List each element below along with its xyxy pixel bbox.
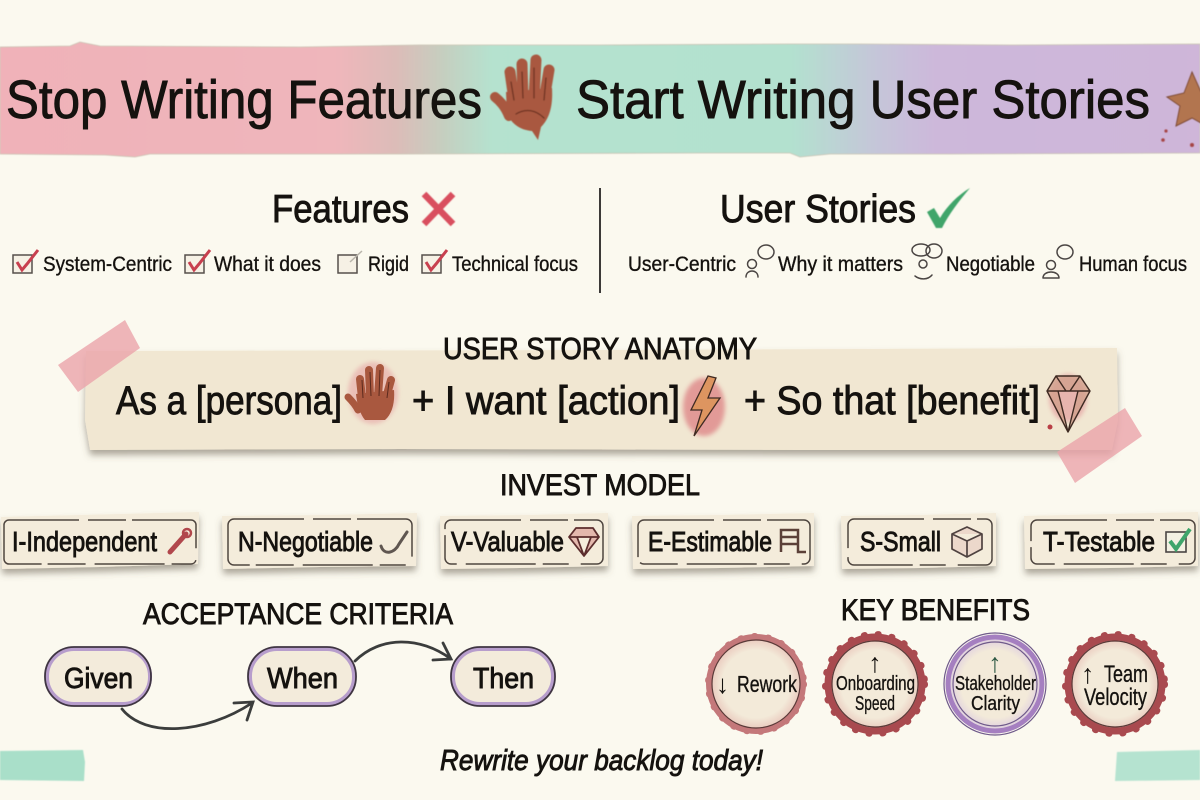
chip: testable — [1024, 512, 1198, 569]
heading: features: Features — [272, 188, 409, 231]
feature item: what it does — [185, 250, 321, 276]
pill: given: Given — [64, 663, 133, 695]
story item: negotiable: Negotiable — [946, 253, 1035, 276]
chip: valuable — [440, 513, 608, 569]
icon: green check — [927, 188, 970, 228]
chip: negotiable: N-Negotiable — [238, 526, 373, 557]
panel: invest chips — [1, 512, 1198, 569]
title banner — [0, 42, 1200, 157]
title text: start writing user stories: Start Writing User Stories — [576, 70, 1150, 130]
chip: estimable: E-Estimable — [648, 526, 772, 557]
seal: team velocity: Team — [1104, 661, 1148, 688]
tape: top left — [58, 320, 140, 392]
heading: acceptance criteria: ACCEPTANCE CRITERIA — [143, 598, 453, 631]
seal: stakeholder clarity — [944, 633, 1046, 735]
icon: red cross — [424, 194, 453, 224]
feature item: system-centric: System-Centric — [43, 253, 172, 276]
seal: stakeholder clarity: Clarity — [971, 693, 1020, 715]
panel: user stories — [628, 188, 1187, 279]
pill: given — [45, 647, 151, 706]
chip: valuable: V-Valuable — [451, 526, 564, 557]
chip: small — [841, 513, 996, 569]
panel: features — [13, 188, 578, 276]
heading: invest model: INVEST MODEL — [500, 469, 700, 502]
seal: stakeholder clarity: ↑ — [988, 648, 1002, 678]
heading: user story anatomy: USER STORY ANATOMY — [443, 331, 757, 366]
seal: onboarding speed: Onboarding — [836, 673, 915, 695]
seal: onboarding speed — [825, 634, 925, 734]
formula: action: + I want [action] — [412, 379, 680, 423]
feature item: technical focus: Technical focus — [452, 253, 578, 276]
icon: persona hand — [348, 362, 398, 424]
story item: why it matters: Why it matters — [778, 253, 903, 276]
formula: benefit: + So that [benefit] — [744, 379, 1040, 423]
pill: when: When — [267, 663, 338, 695]
panel: acceptance criteria — [45, 598, 555, 729]
tape: bottom right — [1057, 408, 1142, 483]
feature item: system-centric — [13, 250, 172, 276]
chip: negotiable — [222, 513, 417, 569]
pill: when — [248, 647, 356, 706]
arrow: when to then — [355, 642, 451, 661]
story item: why it matters — [778, 244, 942, 279]
tape: bottom right — [1115, 750, 1200, 781]
seal: onboarding speed: Speed — [855, 693, 895, 715]
closing call to action: Rewrite your backlog today! — [440, 745, 763, 777]
feature item: technical focus — [422, 250, 578, 276]
seal: rework: Rework — [737, 671, 797, 697]
icon: stop hand — [495, 60, 552, 140]
story item: user-centric — [628, 245, 774, 277]
divider — [599, 188, 601, 293]
seal: stakeholder clarity: Stakeholder — [955, 673, 1036, 695]
panel: user story anatomy — [58, 320, 1142, 483]
chip: testable: T-Testable — [1043, 526, 1155, 557]
heading: key benefits: KEY BENEFITS — [841, 594, 1030, 627]
chip: estimable — [632, 513, 814, 569]
seal: onboarding speed: ↑ — [868, 648, 882, 678]
heading: user stories: User Stories — [720, 188, 916, 231]
seal: team velocity: Velocity — [1084, 684, 1147, 711]
title text: stop writing features: Stop Writing Features — [6, 70, 482, 130]
story item: user-centric: User-Centric — [628, 253, 736, 276]
seal: team velocity: ↑ — [1081, 659, 1094, 689]
formula: persona: As a [persona] — [116, 379, 342, 423]
arrow: given to when — [122, 702, 253, 729]
seal: rework — [708, 636, 804, 732]
chip: independent: I-Independent — [12, 526, 157, 557]
story item: negotiable — [946, 245, 1073, 278]
pill: then — [451, 647, 555, 706]
icon: diamond — [1047, 374, 1090, 432]
feature item: rigid — [338, 251, 409, 276]
feature item: rigid: Rigid — [368, 253, 409, 276]
chip: independent — [1, 512, 199, 569]
paper strip — [85, 348, 1118, 450]
seal: rework: ↓ — [716, 669, 729, 699]
panel: key benefits — [708, 594, 1165, 735]
story item: human focus: Human focus — [1079, 253, 1187, 276]
icon: lightning bolt — [683, 376, 725, 436]
feature item: what it does: What it does — [214, 253, 321, 276]
chip: small: S-Small — [860, 526, 941, 557]
pill: then: Then — [473, 663, 534, 695]
tape: bottom left — [0, 750, 85, 781]
icon: star — [1161, 72, 1200, 147]
seal: team velocity — [1065, 634, 1165, 734]
